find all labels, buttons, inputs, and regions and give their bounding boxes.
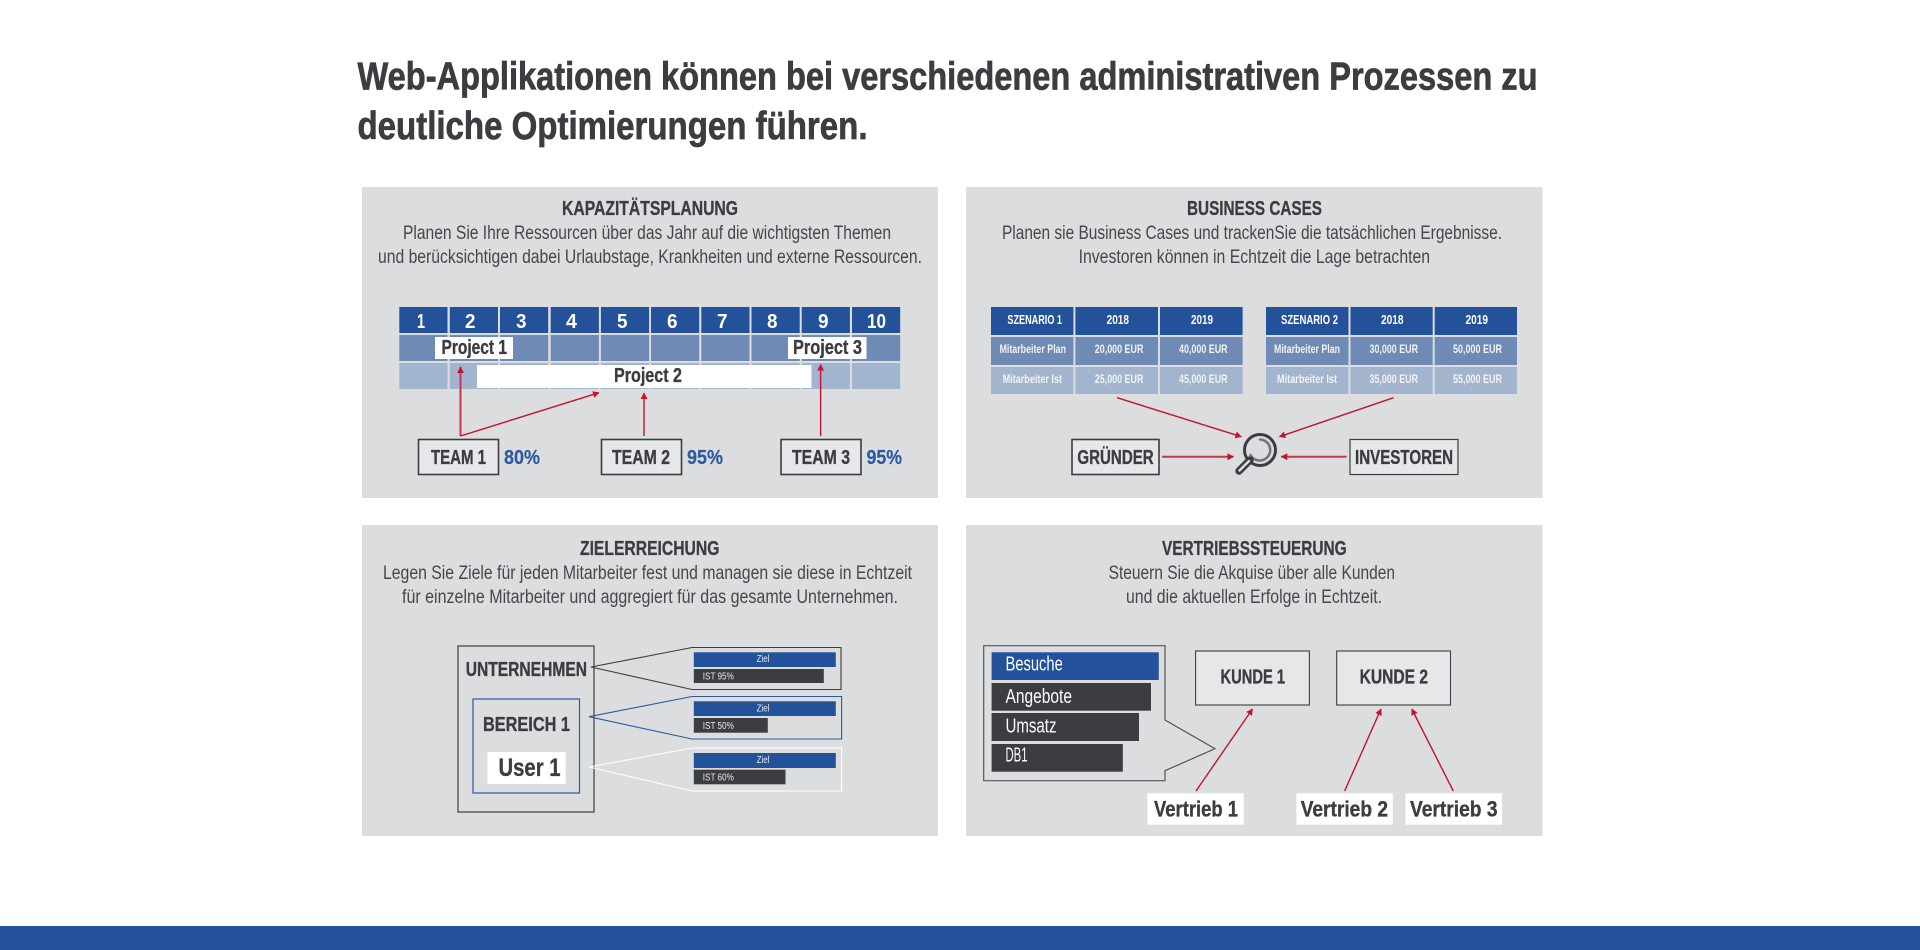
title: Web-Applikationen können bei verschiedenen administrativen Prozessen zu: [358, 56, 1538, 98]
chart: capacity grid: 6: [667, 311, 678, 333]
table: Szenario 1: 25,000 EUR: [1095, 372, 1144, 386]
box: Team 1: TEAM 1: [431, 447, 486, 469]
callout: Unternehmen goal: IST 95%: [703, 672, 734, 683]
table: Szenario 2: SZENARIO 2: [1281, 312, 1338, 327]
chart: capacity grid: 3: [516, 311, 526, 333]
label: Vertrieb 3: Vertrieb 3: [1410, 797, 1498, 822]
box: Investoren: [1350, 440, 1458, 474]
chart: capacity grid: 5: [617, 311, 628, 333]
heading: Zielerreichung: ZIELERREICHUNG: [580, 538, 719, 560]
box: Team 1: [418, 440, 498, 474]
table: Szenario 2: 50,000 EUR: [1453, 342, 1502, 356]
arrow: Vertrieb 1 to Kunde 1: [1196, 709, 1252, 791]
table: Szenario 1: 45,000 EUR: [1179, 372, 1228, 386]
callout: Bereich goal: IST 50%: [703, 721, 734, 732]
callout: Unternehmen goal: [591, 648, 841, 690]
arrow: Szenario 2 to magnifier: [1279, 398, 1394, 437]
box: User 1: User 1: [498, 754, 561, 782]
callout: funnel bars: Besuche: [1006, 654, 1063, 676]
callout: User goal: IST 60%: [703, 773, 734, 784]
box: User 1: [487, 752, 566, 784]
table: Szenario 1: 40,000 EUR: [1179, 342, 1228, 356]
table: Szenario 1: Mitarbeiter Ist: [1003, 372, 1062, 386]
label: Project 2: [477, 365, 812, 388]
table: Szenario 1: [991, 307, 1243, 394]
table: Szenario 2: [1266, 307, 1517, 394]
box: Team 2: TEAM 2: [612, 447, 670, 469]
text block: Business Cases description: [1002, 223, 1502, 268]
box: Kunde 2: KUNDE 2: [1360, 666, 1428, 688]
callout: User goal: Ziel: [757, 755, 770, 766]
value: Team 2 percent: 95%: [687, 447, 723, 469]
text block: Business Cases description: Investoren können in Echtzeit die Lage betrachten: [1079, 247, 1430, 268]
box: Unternehmen: UNTERNEHMEN: [466, 659, 587, 681]
text block: Zielerreichung description: [383, 563, 913, 608]
chart: capacity grid: [399, 307, 900, 389]
chart: capacity grid: 8: [767, 311, 778, 333]
panel: Zielerreichung: [362, 525, 938, 836]
icon: magnifier: [1239, 434, 1276, 471]
table: Szenario 2: 2018: [1381, 312, 1404, 327]
arrow: Investoren to magnifier: [1281, 456, 1347, 458]
text block: Zielerreichung description: für einzelne Mitarbeiter und aggregiert für das gesamte Unternehmen.: [402, 587, 898, 608]
table: Szenario 2: 2019: [1466, 312, 1488, 327]
text block: Vertriebssteuerung description: Steuern Sie die Akquise über alle Kunden: [1109, 563, 1395, 584]
text block: Vertriebssteuerung description: [1109, 563, 1395, 608]
arrow: team 1 to project 2: [460, 393, 599, 436]
label: Project 1: Project 1: [442, 337, 507, 359]
callout: funnel bars: Umsatz: [1006, 716, 1056, 738]
label: Project 2: Project 2: [614, 365, 682, 387]
box: Kunde 1: [1196, 651, 1309, 705]
arrow: Vertrieb 3 to Kunde 2: [1412, 709, 1453, 791]
heading: Business Cases: BUSINESS CASES: [1187, 198, 1322, 220]
title: deutliche Optimierungen führen.: [358, 105, 868, 148]
chart: capacity grid: 9: [818, 311, 828, 333]
arrow: team 1 to project 1: [460, 367, 462, 436]
table: Szenario 1: Mitarbeiter Plan: [1000, 342, 1066, 356]
table: Szenario 1: SZENARIO 1: [1007, 312, 1062, 327]
label: Vertrieb 1: Vertrieb 1: [1154, 797, 1238, 822]
box: Bereich 1: BEREICH 1: [483, 714, 570, 736]
callout: Bereich goal: [589, 696, 842, 739]
arrow: team 3 to project 3: [820, 364, 822, 436]
box: Team 3: [781, 440, 861, 474]
box: Team 3: TEAM 3: [792, 447, 850, 469]
callout: User goal: [589, 748, 842, 791]
chart: capacity grid: 1: [417, 311, 425, 333]
callout: funnel bars: [984, 646, 1215, 781]
table: Szenario 2: Mitarbeiter Ist: [1277, 372, 1337, 386]
value: Team 1 percent: 80%: [504, 447, 540, 469]
chart: capacity grid: 4: [566, 311, 578, 333]
text block: Vertriebssteuerung description: und die aktuellen Erfolge in Echtzeit.: [1126, 587, 1382, 608]
box: Team 2: [602, 440, 682, 474]
table: Szenario 2: 30,000 EUR: [1370, 342, 1418, 356]
box: Investoren: INVESTOREN: [1355, 447, 1453, 469]
footer bar: [0, 926, 1920, 950]
arrow: Szenario 1 to magnifier: [1117, 398, 1241, 437]
table: Szenario 2: Mitarbeiter Plan: [1274, 342, 1340, 356]
box: Unternehmen: [458, 646, 594, 812]
chart: capacity grid: 2: [465, 311, 476, 333]
callout: Bereich goal: Ziel: [757, 704, 770, 715]
arrow: Gründer to magnifier: [1162, 456, 1234, 458]
table: Szenario 1: 2019: [1191, 312, 1213, 327]
box: Kunde 1: KUNDE 1: [1220, 666, 1285, 688]
callout: funnel bars: Angebote: [1006, 686, 1072, 708]
box: Gründer: [1072, 440, 1159, 474]
text block: Kapazitätsplanung description: [378, 223, 922, 268]
label: Project 3: Project 3: [793, 337, 862, 359]
label: Vertrieb 1: [1147, 793, 1244, 825]
text block: Kapazitätsplanung description: und berücksichtigen dabei Urlaubstage, Krankheiten und externe Ressourcen.: [378, 247, 922, 268]
text block: Kapazitätsplanung description: Planen Sie Ihre Ressourcen über das Jahr auf die wichtigsten Themen: [403, 223, 891, 244]
arrow: team 2 to project 2: [643, 393, 645, 436]
title: [358, 56, 1538, 148]
table: Szenario 1: 20,000 EUR: [1095, 342, 1144, 356]
text block: Business Cases description: Planen sie Business Cases und trackenSie die tatsächlichen Ergebnisse.: [1002, 223, 1502, 244]
table: Szenario 2: 55,000 EUR: [1453, 372, 1502, 386]
table: Szenario 1: 2018: [1107, 312, 1129, 327]
box: Bereich 1: [473, 699, 580, 793]
box: Gründer: GRÜNDER: [1077, 446, 1154, 469]
panel: Kapazitätsplanung: [362, 187, 938, 498]
callout: funnel bars: DB1: [1006, 745, 1028, 767]
panel: Business Cases: [966, 187, 1542, 498]
box: Kunde 2: [1337, 651, 1450, 705]
chart: capacity grid: 10: [867, 311, 886, 333]
label: Vertrieb 2: Vertrieb 2: [1301, 797, 1388, 822]
value: Team 3 percent: 95%: [866, 447, 902, 469]
text block: Zielerreichung description: Legen Sie Ziele für jeden Mitarbeiter fest und managen sie diese in Echtzeit: [383, 563, 913, 584]
callout: Unternehmen goal: Ziel: [757, 654, 770, 665]
table: Szenario 2: 35,000 EUR: [1370, 372, 1418, 386]
heading: Kapazitätsplanung: KAPAZITÄTSPLANUNG: [562, 197, 738, 220]
chart: capacity grid: 7: [717, 311, 728, 333]
heading: Vertriebssteuerung: VERTRIEBSSTEUERUNG: [1162, 538, 1347, 560]
panel: Vertriebssteuerung: [966, 525, 1542, 836]
arrow: Vertrieb 2 to Kunde 2: [1345, 709, 1381, 791]
